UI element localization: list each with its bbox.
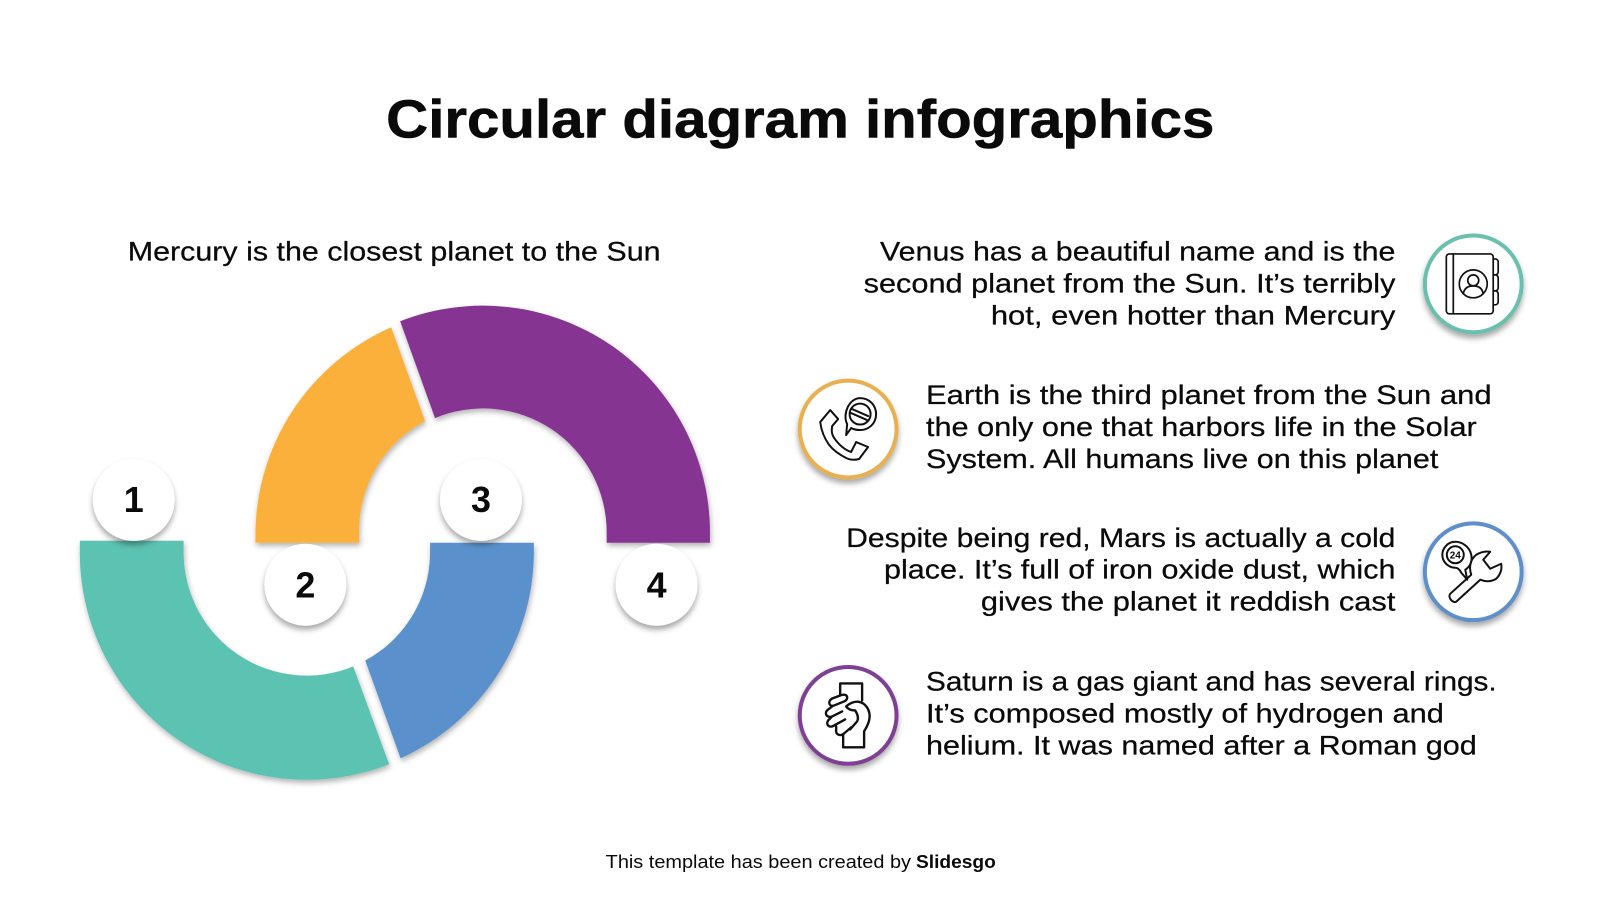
number badge 1 <box>93 459 175 541</box>
icon: wrench with 24 badge <box>1425 523 1522 620</box>
circular diagram <box>80 306 710 780</box>
text: Earth: System. All humans live on this planet <box>926 444 1439 474</box>
footer credit: This template has been created by <box>606 851 912 872</box>
text: Mars: gives the planet it reddish cast <box>981 587 1396 617</box>
title: Circular diagram infographics <box>386 90 1214 150</box>
number badge 3 <box>440 459 522 541</box>
icon: wrench with 24 badge: 24 <box>1450 550 1461 561</box>
text: Earth <box>926 380 1492 474</box>
number badge 1: 1 <box>124 479 144 520</box>
number badge 2 <box>264 544 346 626</box>
text: Saturn: helium. It was named after a Roman god <box>926 730 1477 760</box>
icon: address book <box>1425 235 1522 332</box>
number badge 3: 3 <box>471 479 491 520</box>
text: Mars: place. It’s full of iron oxide dust, which <box>884 555 1395 585</box>
text: Mars <box>846 523 1396 617</box>
segment: teal <box>80 541 389 780</box>
text: Saturn: It’s composed mostly of hydrogen and <box>926 698 1444 728</box>
segment: blue <box>365 543 534 758</box>
number badge 4 <box>616 544 697 626</box>
text: Venus: second planet from the Sun. It’s terribly <box>864 268 1396 298</box>
text: Saturn: Saturn is a gas giant and has several rings. <box>926 666 1497 696</box>
text: Mercury caption: Mercury is the closest planet to the Sun <box>128 236 661 266</box>
text: Venus: Venus has a beautiful name and is the <box>880 236 1395 266</box>
text: Earth: the only one that harbors life in the Solar <box>926 412 1477 442</box>
number badge 2: 2 <box>295 565 315 606</box>
footer credit: Slidesgo <box>916 851 996 872</box>
segment: purple <box>400 306 710 543</box>
icon: hand holding phone <box>800 667 897 764</box>
icon: blocked phone <box>800 381 897 477</box>
text: Earth: Earth is the third planet from the Sun and <box>926 380 1492 410</box>
text: Saturn <box>926 666 1497 760</box>
text: Venus: hot, even hotter than Mercury <box>991 300 1396 330</box>
segment: orange <box>255 327 425 543</box>
number badge 4: 4 <box>647 565 667 606</box>
text: Mars: Despite being red, Mars is actually a cold <box>846 523 1395 553</box>
text: Venus <box>864 236 1396 330</box>
